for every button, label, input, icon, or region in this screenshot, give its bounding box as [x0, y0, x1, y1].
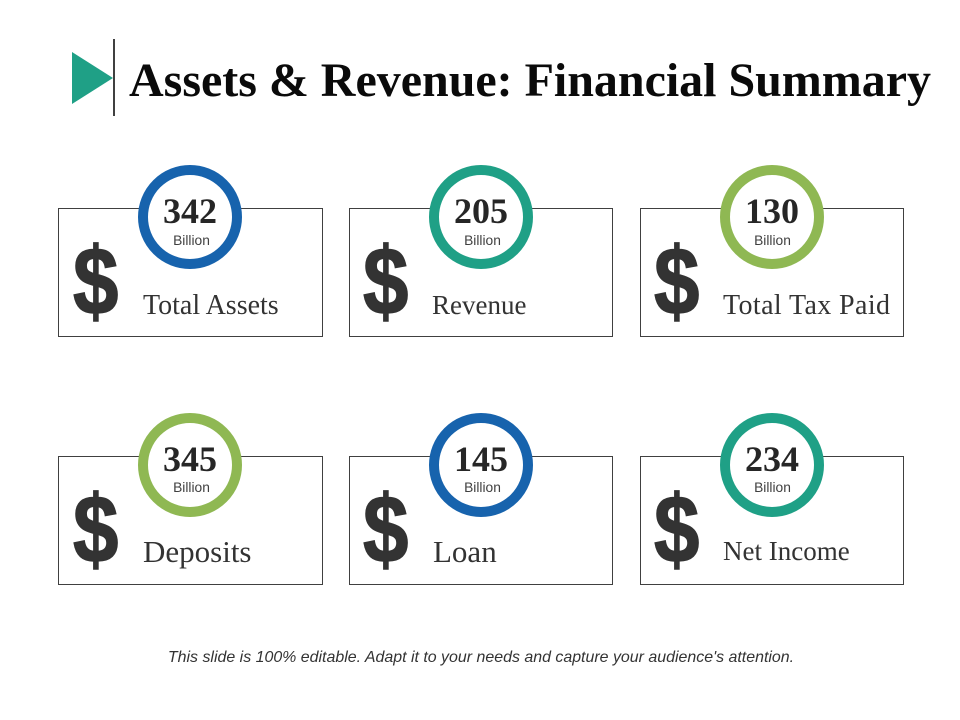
unit: Billion: Billion: [754, 480, 791, 495]
icon: title triangle: [72, 52, 113, 104]
panel: Revenue: [350, 170, 612, 336]
unit: Billion: Billion: [464, 480, 501, 495]
unit: Billion: Billion: [173, 233, 210, 248]
panel: Loan: [350, 418, 612, 584]
value: 234: 234: [745, 439, 799, 479]
icon: dollar sign: $: [73, 227, 118, 334]
panel: Total Tax Paid: [640, 170, 904, 336]
panel: Total Assets: [58, 170, 322, 336]
unit: Billion: Billion: [754, 233, 791, 248]
label: Deposits: Deposits: [143, 534, 252, 569]
panel: Net Income: [640, 418, 904, 584]
panel: Deposits: [58, 418, 322, 584]
value: 345: 345: [163, 439, 217, 479]
ring: 345: [143, 418, 237, 512]
icon: dollar sign: $: [654, 227, 699, 334]
icon: dollar sign: $: [363, 227, 408, 334]
ring: 342: [143, 170, 237, 264]
title: Assets & Revenue: Financial Summary: [129, 54, 931, 107]
value: 342: 342: [163, 191, 217, 231]
icon: dollar sign: $: [654, 475, 699, 582]
label: Revenue: Revenue: [432, 290, 526, 320]
icon: dollar sign: $: [363, 475, 408, 582]
icon: dollar sign: $: [73, 475, 118, 582]
unit: Billion: Billion: [464, 233, 501, 248]
label: Net Income: Net Income: [723, 536, 850, 566]
ring: 205: [434, 170, 528, 264]
value: 145: 145: [454, 439, 508, 479]
label: Total Assets: Total Assets: [143, 290, 279, 321]
value: 205: 205: [454, 191, 508, 231]
title divider line: [113, 39, 115, 116]
label: Total Tax Paid: Total Tax Paid: [723, 290, 890, 321]
ring: 145: [434, 418, 528, 512]
footer note: This slide is 100% editable. Adapt it to your needs and capture your audience's attention.: [168, 649, 794, 666]
ring: 234: [725, 418, 819, 512]
unit: Billion: Billion: [173, 480, 210, 495]
label: Loan: Loan: [433, 534, 497, 569]
ring: 130: [725, 170, 819, 264]
value: 130: 130: [745, 191, 799, 231]
